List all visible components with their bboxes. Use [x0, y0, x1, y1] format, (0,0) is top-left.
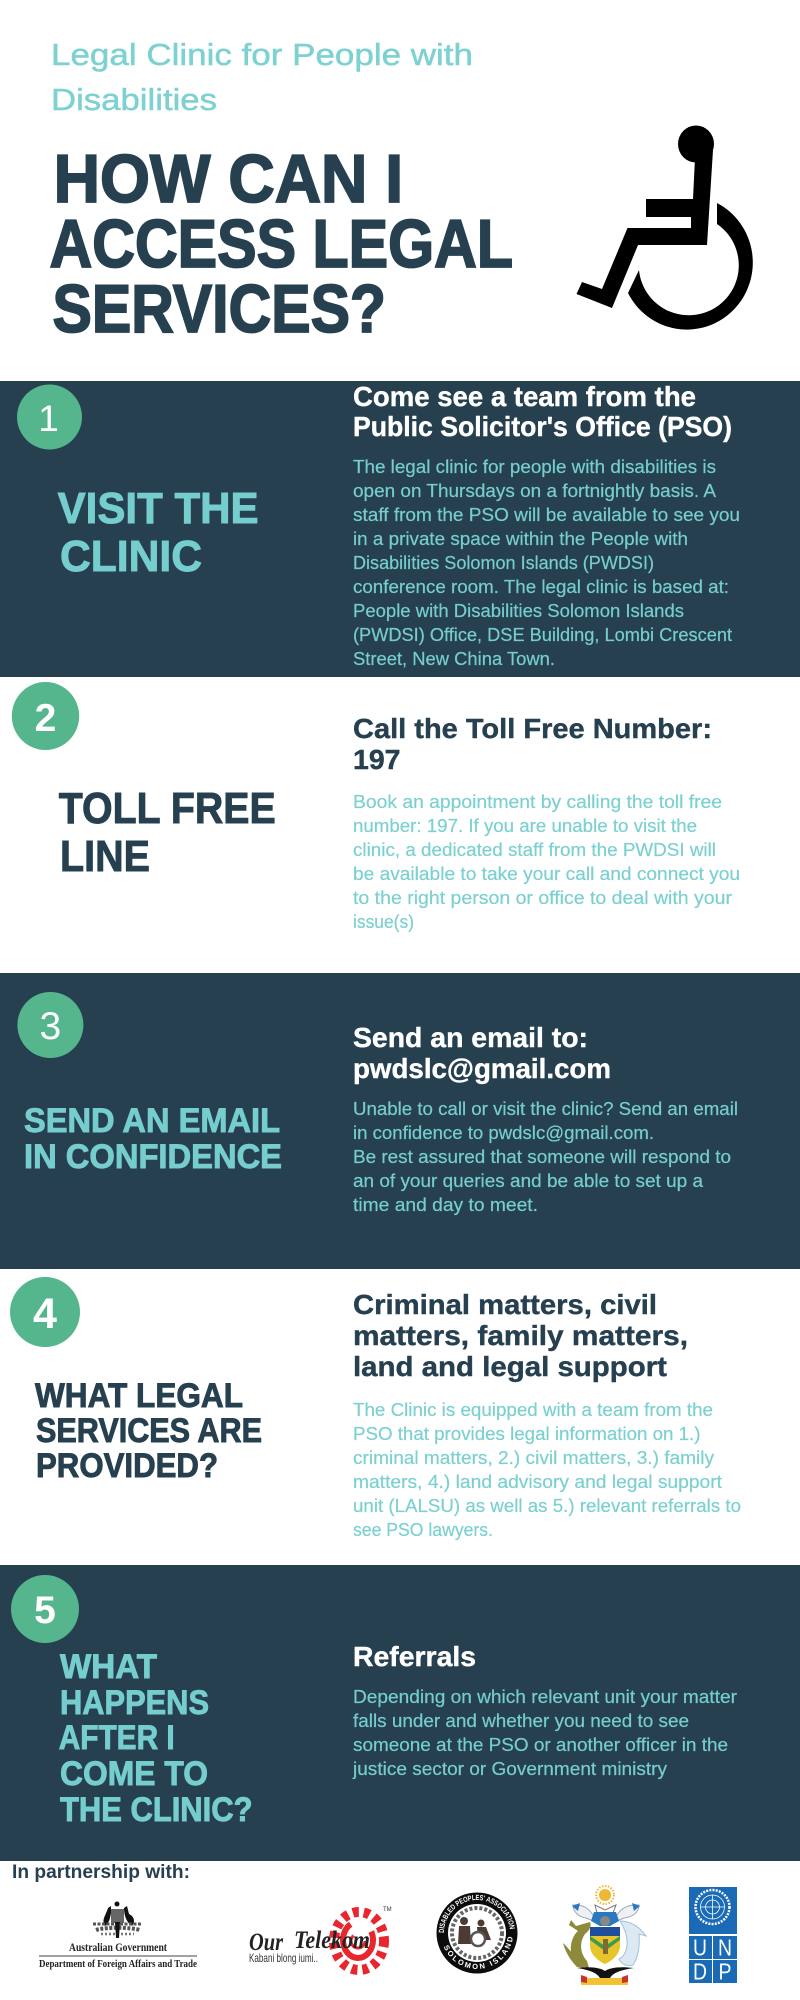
logo: Australian Government [39, 1902, 198, 1970]
step 5 label: WHAT [60, 1648, 157, 1686]
step number 5: 5 [34, 1589, 56, 1632]
red sun mark [334, 1912, 384, 1970]
step 3 heading [353, 1022, 611, 1084]
step 5 label: HAPPENS [60, 1684, 209, 1722]
step 4 heading: land and legal support [353, 1351, 667, 1382]
step 1 body text: Disabilities Solomon Islands (PWDSI) [353, 553, 654, 573]
step 1 body text: (PWDSI) Office, DSE Building, Lombi Crescent [353, 625, 732, 645]
step 5 body text: falls under and whether you need to see [353, 1711, 689, 1731]
step 5 heading: Referrals [353, 1641, 476, 1672]
step 1 body text: conference room. The legal clinic is based at: [353, 577, 729, 597]
step 1 body text: The legal clinic for people with disabilities is [353, 457, 716, 477]
logo: Disabled Peoples' Association [436, 1892, 518, 1974]
step 4 body text: matters, 4.) land advisory and legal support [353, 1472, 722, 1492]
logo: Our Telekom: Our [249, 1929, 283, 1956]
figures [458, 1917, 491, 1944]
step 4 body text: PSO that provides legal information on 1.) [353, 1424, 700, 1444]
step 3 label [24, 1102, 282, 1176]
step 3 label: IN CONFIDENCE [24, 1138, 282, 1176]
step 4 body text: The Clinic is equipped with a team from the [353, 1400, 713, 1420]
main title: SERVICES? [52, 271, 386, 347]
step 2 heading [353, 713, 712, 775]
logo: Our Telekom: TM [383, 1907, 392, 1913]
step 1 body text: staff from the PSO will be available to see you [353, 505, 740, 525]
helmet and mantling [595, 1905, 616, 1913]
step 1 heading: Come see a team from the [353, 381, 696, 412]
step number 2: 2 [35, 697, 56, 740]
step 5 label: THE CLINIC? [60, 1791, 252, 1829]
step 1 heading: Public Solicitor's Office (PSO) [353, 411, 732, 442]
step 1 heading [353, 381, 732, 442]
step number 5 [11, 1575, 79, 1643]
shark [619, 1921, 646, 1966]
logo: Our Telekom: Kabani blong iumi.. [249, 1951, 318, 1965]
partnership heading: In partnership with: [12, 1862, 190, 1883]
step 3 label: SEND AN EMAIL [24, 1102, 280, 1140]
step 5 label: AFTER I [59, 1719, 175, 1757]
step 2 body text [353, 792, 740, 932]
main title [50, 141, 513, 347]
step 5 body text: someone at the PSO or another officer in the [353, 1735, 728, 1755]
step 4 label [35, 1377, 262, 1485]
sun [599, 1889, 611, 1901]
step 2 heading: 197 [353, 744, 400, 775]
logo: Disabled Peoples' Association: SOLOMON ISLANDS [444, 1936, 512, 1969]
step number 3 [17, 992, 83, 1058]
logo: UNDP: P [718, 1958, 732, 1984]
step number 2 [12, 682, 79, 750]
step 4 body text: unit (LALSU) as well as 5.) relevant referrals to [353, 1496, 741, 1516]
step 1 label: CLINIC [60, 532, 202, 581]
step 1 body text: open on Thursdays on a fortnightly basis. A [353, 481, 716, 501]
step 3 body text [353, 1099, 738, 1215]
step number 1 [17, 384, 82, 450]
step number 3: 3 [40, 1005, 61, 1048]
UN emblem [696, 1890, 730, 1924]
shield [590, 1927, 620, 1964]
step 4 heading: matters, family matters, [353, 1320, 688, 1351]
step 2 body text: clinic, a dedicated staff from the PWDSI will [353, 840, 716, 860]
icon: wheelchair user [576, 126, 753, 330]
step 2 label: TOLL FREE [59, 784, 276, 833]
step 1 body text: People with Disabilities Solomon Islands [353, 601, 684, 621]
step 4 heading [353, 1289, 688, 1382]
step 2 body text: to the right person or office to deal with your [353, 888, 732, 908]
step number 4 [10, 1277, 80, 1347]
step 2 label [59, 784, 276, 881]
step 2 body text: issue(s) [353, 912, 414, 932]
logo: UNDP [689, 1887, 737, 1984]
step 5 label [59, 1648, 253, 1829]
step 3 body text: in confidence to pwdslc@gmail.com. [353, 1123, 654, 1143]
step 4 body text: see PSO lawyers. [353, 1520, 493, 1540]
step 1 body text: in a private space within the People with [353, 529, 688, 549]
step 4 body text: criminal matters, 2.) civil matters, 3.) family [353, 1448, 714, 1468]
main title: HOW CAN I [54, 141, 403, 217]
step 4 body text [353, 1400, 741, 1540]
panel: step 2 toll free line [0, 677, 800, 973]
main title: ACCESS LEGAL [50, 206, 513, 282]
step 5 body text: justice sector or Government ministry [352, 1759, 667, 1779]
frigate bird [577, 1967, 634, 1978]
logo: Australian Government: Department of Foreign Affairs and Trade [39, 1959, 198, 1970]
step 5 body text [352, 1687, 737, 1779]
panel: step 4 legal services provided [0, 1269, 800, 1565]
step 1 label [58, 484, 259, 581]
coat of arms crest [93, 1902, 142, 1938]
step 1 body text [353, 457, 740, 669]
header subtitle: Disabilities [51, 82, 217, 117]
header subtitle: Legal Clinic for People with [51, 37, 473, 72]
step 2 body text: number: 197. If you are unable to visit the [353, 816, 697, 836]
logo: Australian Government: Australian Government [69, 1940, 167, 1954]
logo: Our Telekom: Telekom [294, 1927, 370, 1954]
step 1 label: VISIT THE [58, 484, 259, 533]
step 3 body text: Unable to call or visit the clinic? Send an email [353, 1099, 738, 1119]
step 5 label: COME TO [60, 1755, 208, 1793]
step 2 body text: Book an appointment by calling the toll free [353, 792, 722, 812]
step number 4: 4 [33, 1290, 57, 1338]
step number 1: 1 [38, 398, 59, 439]
panel: step 1 visit the clinic [0, 381, 800, 677]
logo: UNDP: D [693, 1958, 707, 1984]
panel: step 3 send an email [0, 973, 800, 1269]
step 4 label: SERVICES ARE [36, 1412, 262, 1450]
logo: UNDP: U [693, 1934, 707, 1960]
header subtitle [51, 37, 473, 117]
step 3 heading: Send an email to: [353, 1022, 588, 1053]
step 3 body text: Be rest assured that someone will respond to [353, 1147, 731, 1167]
panel: step 5 referrals [0, 1565, 800, 1861]
step 4 heading: Criminal matters, civil [353, 1289, 657, 1320]
motto scroll [581, 1978, 628, 1985]
step 1 body text: Street, New China Town. [353, 649, 555, 669]
step 2 body text: be available to take your call and connect you [353, 864, 740, 884]
step 3 body text: an of your queries and be able to set up a [353, 1171, 704, 1191]
step 3 body text: time and day to meet. [353, 1195, 538, 1215]
logo: Disabled Peoples' Association: DISABLED PEOPLES' ASSOCIATION [438, 1894, 515, 1933]
step 5 body text: Depending on which relevant unit your matter [353, 1687, 737, 1707]
step 4 label: WHAT LEGAL [35, 1377, 243, 1415]
logo: Solomon Islands coat of arms [563, 1886, 646, 1985]
step 2 label: LINE [60, 832, 150, 881]
step 3 heading: pwdslc@gmail.com [353, 1053, 611, 1084]
logo: Our Telekom [249, 1907, 392, 1970]
crocodile [569, 1920, 591, 1968]
step 2 heading: Call the Toll Free Number: [353, 713, 712, 744]
logo: UNDP: N [718, 1934, 732, 1960]
step 4 label: PROVIDED? [36, 1447, 218, 1485]
